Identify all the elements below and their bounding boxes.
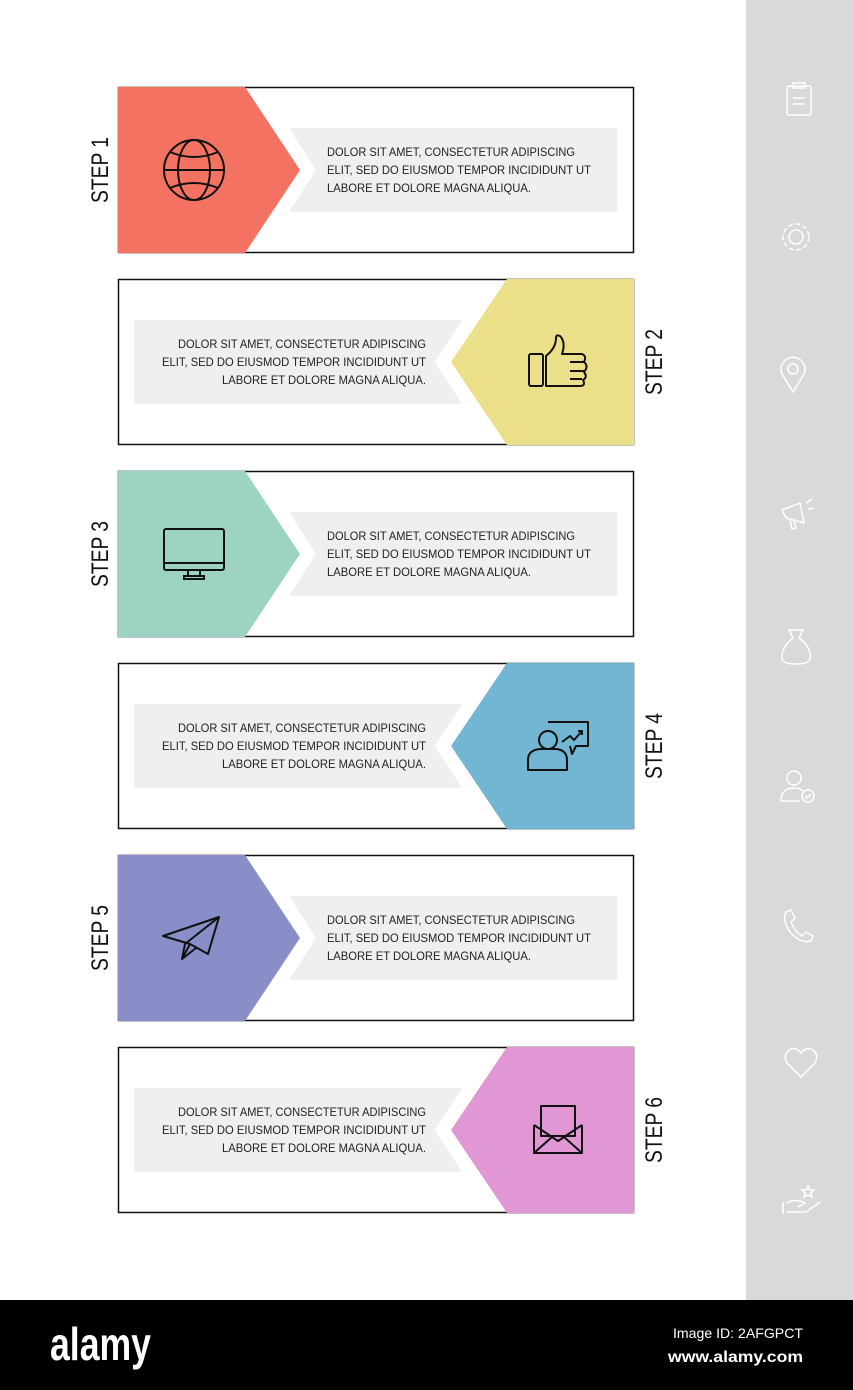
arrow: step 3 [118, 471, 300, 637]
icon: gear [783, 224, 809, 250]
icon: money bag [782, 630, 810, 664]
text box: step 5 [289, 896, 617, 980]
icon: heart [785, 1049, 817, 1077]
icon: clipboard [787, 83, 811, 115]
icon: phone [785, 910, 813, 942]
icon: envelope [534, 1106, 582, 1153]
text box: step 5: DOLOR SIT AMET, CONSECTETUR ADIPISCING [327, 915, 575, 927]
icon: thumbs up [529, 335, 586, 386]
step 4 panel [118, 663, 668, 829]
text box: step 5: LABORE ET DOLORE MAGNA ALIQUA. [327, 951, 531, 963]
text box: step 4: DOLOR SIT AMET, CONSECTETUR ADIPISCING [178, 723, 426, 735]
label: step 5: STEP 5 [87, 905, 114, 971]
text box: step 3: LABORE ET DOLORE MAGNA ALIQUA. [327, 567, 531, 579]
step 3 panel [87, 471, 634, 637]
text box: step 5: ELIT, SED DO EIUSMOD TEMPOR INCIDIDUNT UT [327, 933, 591, 945]
icon: location pin [781, 357, 805, 392]
arrow: step 1 [118, 87, 300, 253]
label: step 3: STEP 3 [87, 521, 114, 587]
text box: step 4: LABORE ET DOLORE MAGNA ALIQUA. [222, 759, 426, 771]
step 6 panel [118, 1047, 668, 1213]
label: step 2: STEP 2 [641, 329, 668, 395]
text box: step 1: ELIT, SED DO EIUSMOD TEMPOR INCIDIDUNT UT [327, 165, 591, 177]
icon: globe [164, 140, 224, 200]
arrow: step 6 [451, 1047, 634, 1213]
text box: step 4 [134, 704, 462, 788]
icon: paper plane [163, 917, 219, 959]
arrow: step 4 [451, 663, 634, 829]
text box: step 2 [134, 320, 462, 404]
text box: step 6: LABORE ET DOLORE MAGNA ALIQUA. [222, 1143, 426, 1155]
label: step 4: STEP 4 [641, 713, 668, 779]
icon: person with chart [528, 722, 588, 770]
footer [0, 1300, 853, 1390]
step 2 panel [118, 279, 668, 445]
text box: step 2: ELIT, SED DO EIUSMOD TEMPOR INCIDIDUNT UT [162, 357, 426, 369]
icon: megaphone [782, 499, 814, 529]
sidebar [746, 0, 853, 1300]
icon: hand with star [783, 1186, 820, 1214]
text box: step 6: DOLOR SIT AMET, CONSECTETUR ADIPISCING [178, 1107, 426, 1119]
icon: user check [781, 771, 814, 802]
arrow: step 2 [451, 279, 634, 445]
text box: step 3: DOLOR SIT AMET, CONSECTETUR ADIPISCING [327, 531, 575, 543]
text box: step 1: LABORE ET DOLORE MAGNA ALIQUA. [327, 183, 531, 195]
icon: monitor [164, 529, 224, 579]
text box: step 4: ELIT, SED DO EIUSMOD TEMPOR INCIDIDUNT UT [162, 741, 426, 753]
text box: step 6: ELIT, SED DO EIUSMOD TEMPOR INCIDIDUNT UT [162, 1125, 426, 1137]
logo: alamy: alamy [50, 1318, 151, 1370]
label: step 6: STEP 6 [641, 1097, 668, 1163]
website: www.alamy.com [667, 1349, 803, 1366]
label: step 1: STEP 1 [87, 137, 114, 203]
step 1 panel [87, 87, 634, 253]
text box: step 3: ELIT, SED DO EIUSMOD TEMPOR INCIDIDUNT UT [327, 549, 591, 561]
text box: step 6 [134, 1088, 462, 1172]
text box: step 2: LABORE ET DOLORE MAGNA ALIQUA. [222, 375, 426, 387]
image id: Image ID: 2AFGPCT [673, 1325, 803, 1341]
text box: step 3 [289, 512, 617, 596]
text box: step 1: DOLOR SIT AMET, CONSECTETUR ADIPISCING [327, 147, 575, 159]
step 5 panel [87, 855, 634, 1021]
arrow: step 5 [118, 855, 300, 1021]
text box: step 2: DOLOR SIT AMET, CONSECTETUR ADIPISCING [178, 339, 426, 351]
text box: step 1 [289, 128, 617, 212]
